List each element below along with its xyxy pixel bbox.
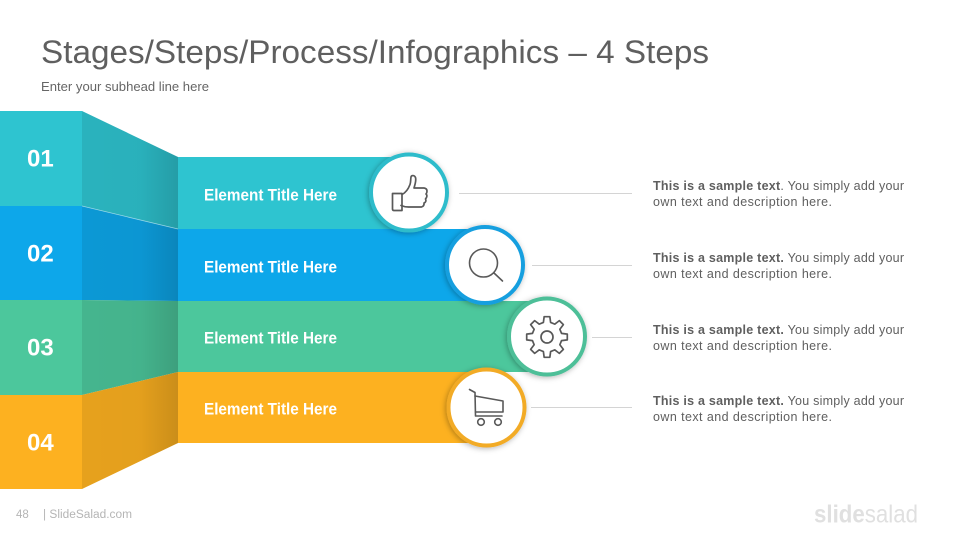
number 04: 04	[27, 430, 54, 456]
title 2: Element Title Here	[204, 258, 337, 276]
circle 4 with cart icon	[448, 370, 524, 446]
number 01: 01	[27, 146, 54, 172]
step 4 title bar	[178, 372, 486, 443]
description 3: own text and description here.	[653, 339, 832, 353]
description 4: own text and description here.	[653, 410, 832, 424]
description 1	[653, 179, 904, 209]
title 1: Element Title Here	[204, 186, 337, 204]
description 2: This is a sample text. You simply add your	[653, 251, 904, 265]
description 4	[653, 394, 904, 424]
footer page number and site: 48	[16, 509, 29, 521]
icon: thumbs up	[392, 176, 427, 210]
title: Stages/Steps/Process/Infographics – 4 Steps	[41, 34, 709, 70]
step 1 title bar	[178, 157, 410, 229]
description 4: This is a sample text. You simply add your	[653, 394, 904, 408]
icon: shopping cart	[470, 390, 503, 425]
connector lines	[459, 194, 632, 408]
description 1: This is a sample text. You simply add your	[653, 179, 904, 193]
subhead: Enter your subhead line here	[41, 80, 209, 94]
title 4: Element Title Here	[204, 400, 337, 418]
step numbers	[27, 146, 54, 456]
step 4 slanted side	[82, 372, 178, 489]
step 3 number block	[0, 300, 82, 395]
circle 1 with thumbs up icon	[371, 154, 447, 230]
step 1 band	[0, 111, 410, 229]
step 1 slanted side	[82, 111, 178, 229]
number 03: 03	[27, 334, 54, 362]
circle 3 with gear icon	[509, 298, 585, 374]
step 4 band	[0, 372, 486, 489]
circle 2 with magnifier icon	[447, 227, 523, 303]
description 2	[653, 251, 904, 281]
icon: gear	[527, 317, 567, 357]
description 3: This is a sample text. You simply add your	[653, 323, 904, 337]
step 2 title bar	[178, 229, 485, 301]
step 1 number block	[0, 111, 82, 206]
title 3: Element Title Here	[204, 330, 337, 348]
step 2 slanted side	[82, 206, 178, 301]
icon: magnifier	[470, 249, 502, 281]
description 3	[653, 323, 904, 353]
step 3 title bar	[178, 301, 547, 372]
step 4 number block	[0, 395, 82, 489]
number 02: 02	[27, 240, 54, 268]
description 1: own text and description here.	[653, 195, 832, 209]
step 3 band	[0, 300, 547, 395]
footer logo wordmark: slidesalad	[814, 500, 918, 528]
step 2 band	[0, 206, 485, 301]
footer page number and site: | SlideSalad.com	[43, 509, 132, 521]
step 2 number block	[0, 206, 82, 300]
step 3 slanted side	[82, 300, 178, 395]
element titles	[204, 186, 337, 418]
description 2: own text and description here.	[653, 267, 832, 281]
